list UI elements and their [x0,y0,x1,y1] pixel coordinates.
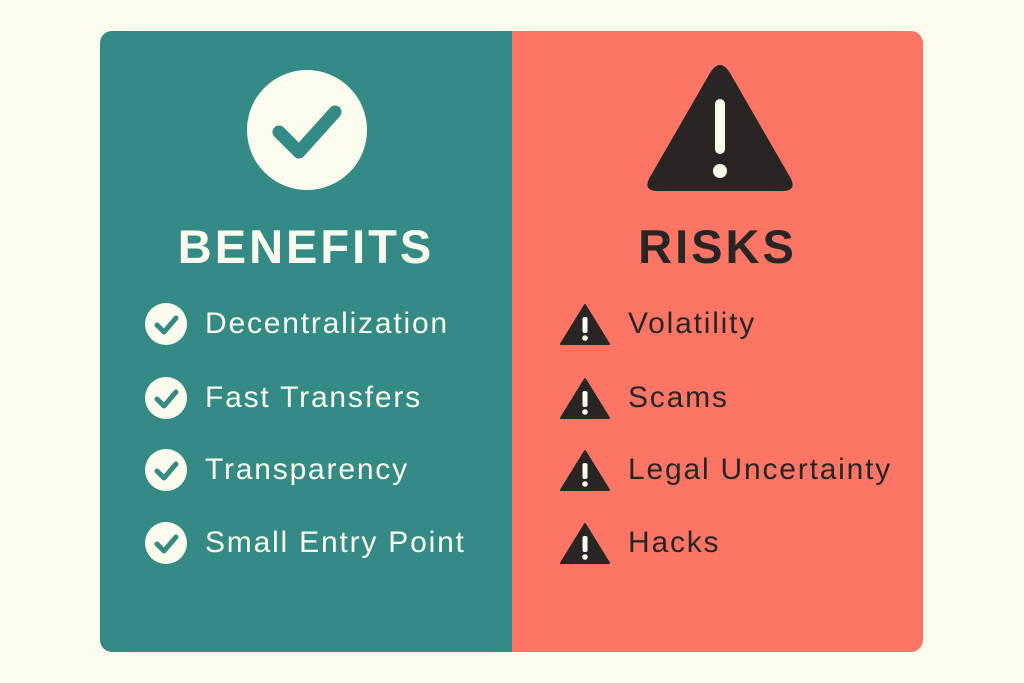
item: Fast Transfers [145,377,422,419]
panel: risks [512,31,923,652]
panel: benefits: Transparency [205,453,409,486]
panel: risks: Hacks [628,526,720,559]
item: Volatility [560,304,756,345]
card [100,31,923,652]
item: Transparency [145,449,409,491]
icon: big warning [647,65,793,191]
panel: benefits: Fast Transfers [205,381,422,414]
item: Hacks [560,523,720,564]
panel: risks: Scams [628,381,729,414]
item: Small Entry Point [145,522,466,564]
heading: risks: RISKS [638,220,797,273]
panel: benefits [100,31,512,652]
panel: benefits: Small Entry Point [205,526,466,559]
item: Scams [560,378,729,419]
panel: benefits: Decentralization [205,307,449,340]
item: Legal Uncertainty [560,450,892,491]
panel: risks: Legal Uncertainty [628,453,892,486]
item: Decentralization [145,303,449,345]
heading: benefits: BENEFITS [178,220,434,273]
panel: risks: Volatility [628,307,756,340]
icon: big check [247,70,367,190]
